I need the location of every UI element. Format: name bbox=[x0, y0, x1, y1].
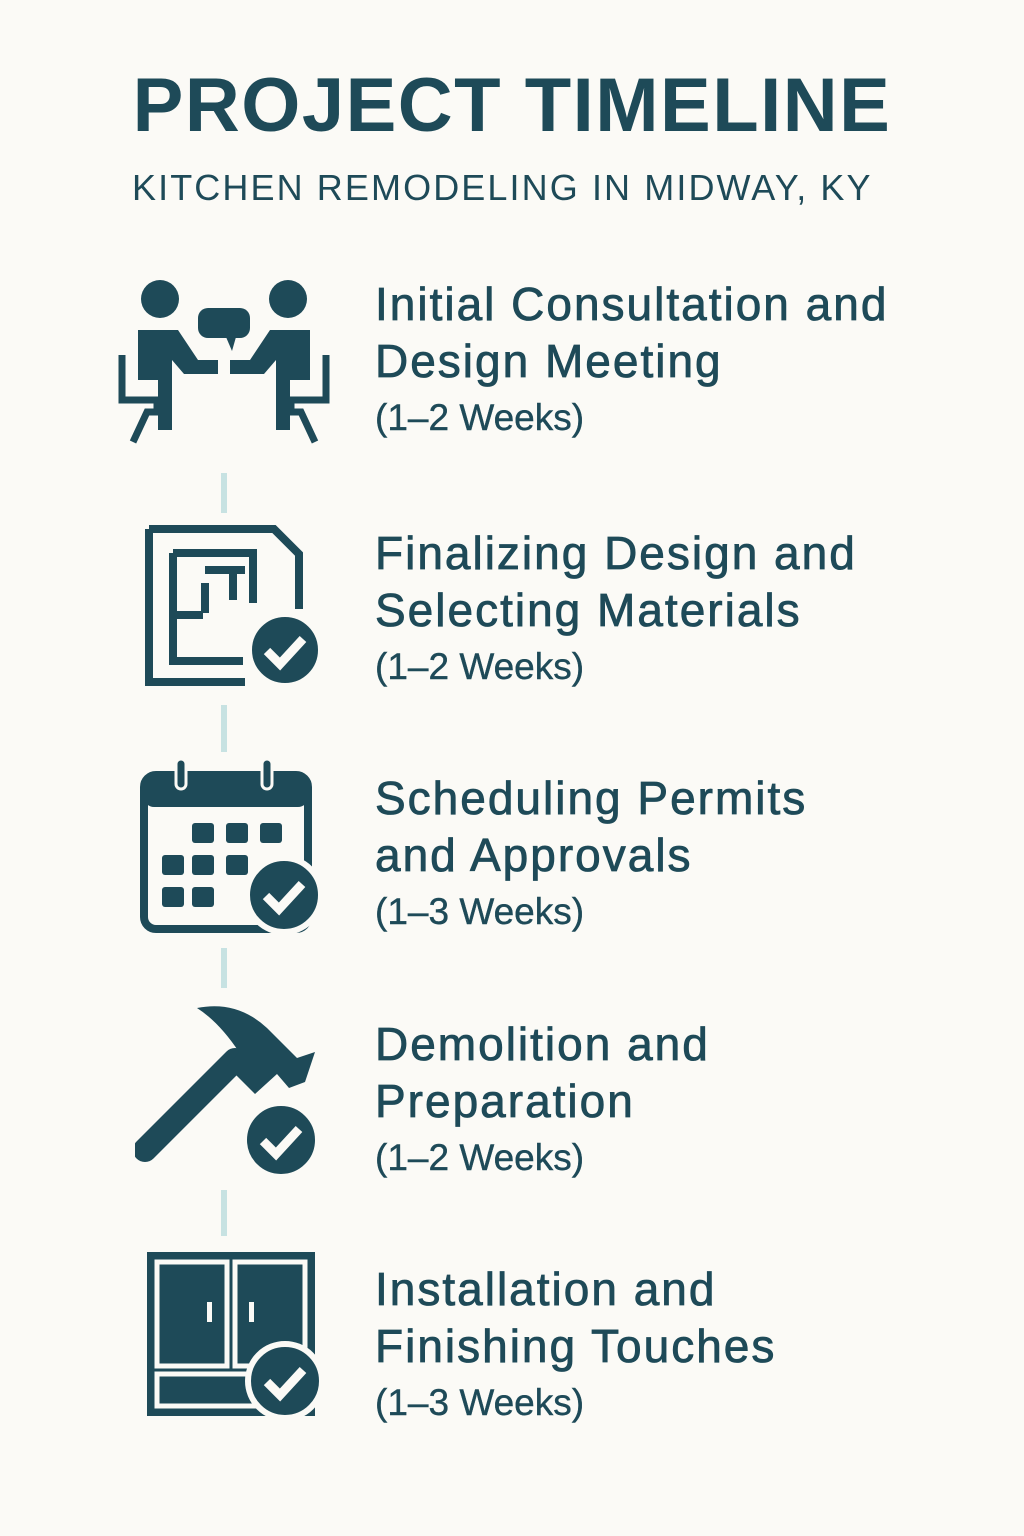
step 5 text bbox=[375, 1263, 776, 1423]
step 4 text bbox=[375, 1018, 710, 1178]
icon: blueprint with check bbox=[145, 525, 318, 686]
step 3 text bbox=[375, 772, 807, 932]
connector 4 bbox=[221, 1190, 227, 1236]
step 3 text: and Approvals bbox=[375, 829, 693, 881]
step 2 text: Selecting Materials bbox=[375, 584, 802, 636]
icon: cabinet with check bbox=[147, 1252, 319, 1416]
step 3 text: Scheduling Permits bbox=[375, 772, 807, 824]
step 5 text: Installation and bbox=[375, 1263, 716, 1315]
icon: hammer with check bbox=[135, 1006, 315, 1174]
connector 2 bbox=[221, 705, 227, 752]
icon: consultation meeting bbox=[118, 280, 330, 444]
step 4 text: Preparation bbox=[375, 1075, 635, 1127]
step 5 text: Finishing Touches bbox=[375, 1320, 776, 1372]
step 1 text: Design Meeting bbox=[375, 335, 723, 387]
step 1 text: (1–2 Weeks) bbox=[375, 397, 584, 438]
step 2 text bbox=[375, 527, 857, 687]
step 4 text: (1–2 Weeks) bbox=[375, 1137, 584, 1178]
subtitle: KITCHEN REMODELING IN MIDWAY, KY bbox=[132, 167, 873, 208]
connector 3 bbox=[221, 948, 227, 988]
title: PROJECT TIMELINE bbox=[133, 63, 891, 148]
connector 1 bbox=[221, 473, 227, 513]
step 5 text: (1–3 Weeks) bbox=[375, 1382, 584, 1423]
step 3 text: (1–3 Weeks) bbox=[375, 891, 584, 932]
step 2 text: (1–2 Weeks) bbox=[375, 646, 584, 687]
icon: calendar with check bbox=[140, 760, 318, 933]
step 1 text bbox=[375, 278, 888, 438]
step 1 text: Initial Consultation and bbox=[375, 278, 888, 330]
step 4 text: Demolition and bbox=[375, 1018, 710, 1070]
step 2 text: Finalizing Design and bbox=[375, 527, 857, 579]
